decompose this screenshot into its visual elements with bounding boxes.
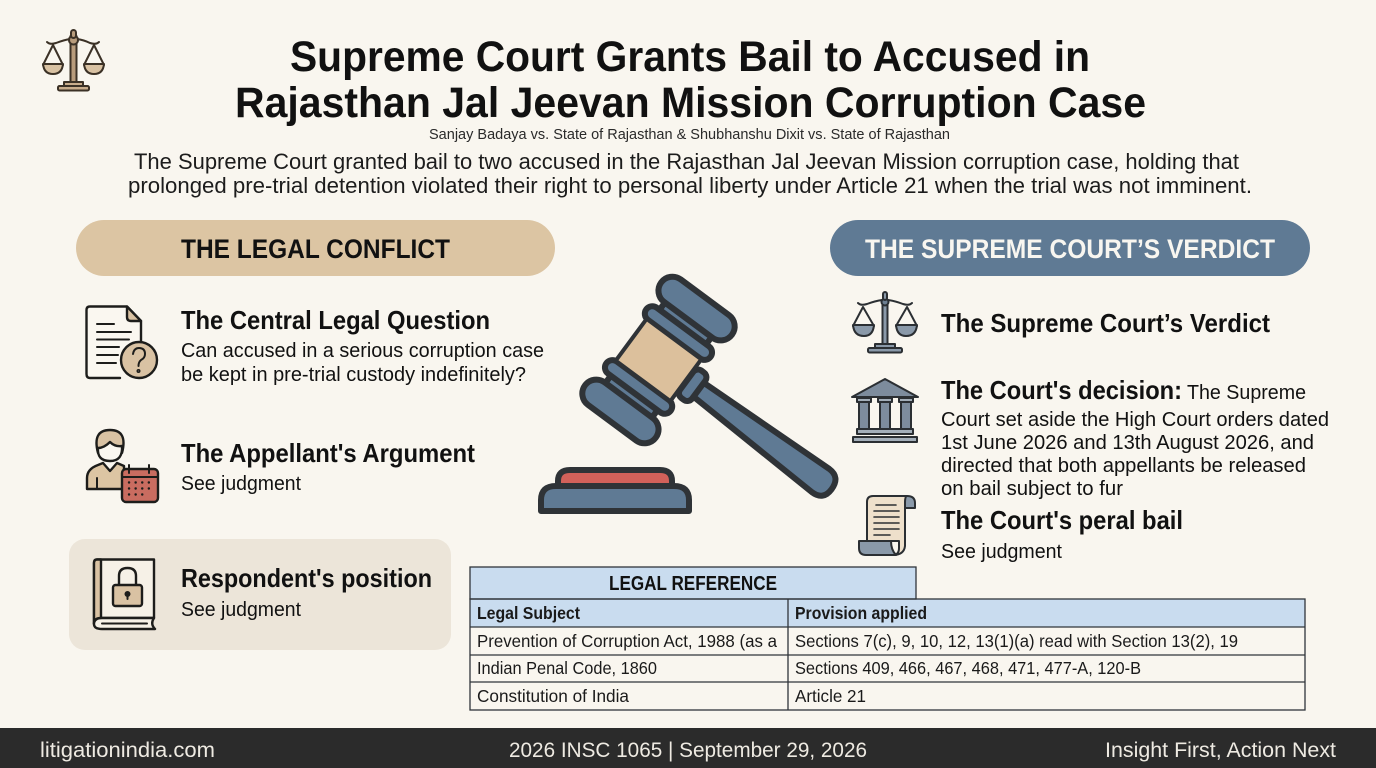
text: the court's decision: The Court's decision: [941, 375, 1182, 405]
text: respondent's position: See judgment [181, 599, 301, 621]
table header row: Legal Subject [477, 603, 580, 623]
icon: book with padlock [94, 560, 155, 629]
panel: respondent's position [69, 539, 451, 650]
table row: constitution of india: Article 21 [795, 686, 866, 706]
icon: scales of justice, verdict [853, 292, 917, 352]
table row: prevention of corruption act: Sections 7(c), 9, 10, 12, 13(1)(a) read with Section 13(2), 19 [795, 631, 1238, 651]
text: the court's decision: 1st June 2026 and 13th August 2026, and [941, 432, 1314, 454]
panel heading: the legal conflict [76, 220, 555, 276]
text: the court's decision: Court set aside the High Court orders dated [941, 409, 1329, 431]
text: the court's peral bail: The Court's peral bail [941, 505, 1183, 535]
table row: indian penal code: Indian Penal Code, 1860 [477, 658, 657, 678]
text: the central legal question: Can accused in a serious corruption case [181, 340, 544, 362]
table title: LEGAL REFERENCE [609, 572, 777, 595]
gavel base [541, 470, 689, 511]
text: the appellant's argument: The Appellant's Argument [181, 438, 475, 468]
text: the supreme court's verdict: The Supreme Court’s Verdict [941, 308, 1270, 338]
subtitle: case names: Sanjay Badaya vs. State of Rajasthan & Shubhanshu Dixit vs. State of Rajasthan [429, 127, 950, 143]
text: respondent's position: Respondent's position [181, 563, 432, 593]
table header row: Provision applied [795, 603, 927, 623]
table row: indian penal code [477, 658, 1141, 678]
table row: indian penal code: Sections 409, 466, 467, 468, 471, 477-A, 120-B [795, 658, 1141, 678]
icon: courthouse [852, 379, 918, 442]
panel heading: the supreme court's verdict: THE SUPREME COURT’S VERDICT [865, 234, 1275, 264]
text: the court's peral bail: See judgment [941, 541, 1062, 563]
table row: constitution of india: Constitution of India [477, 686, 629, 706]
icon: scroll [859, 496, 915, 555]
text: the court's decision: on bail subject to fur [941, 478, 1123, 500]
summary text [128, 149, 1252, 198]
footer bar [0, 728, 1376, 768]
title [235, 33, 1146, 127]
text: the court's peral bail [941, 505, 1183, 563]
icon: scales of justice, header [43, 30, 104, 90]
text: the central legal question: The Central Legal Question [181, 305, 490, 335]
text: the appellant's argument [181, 438, 475, 495]
footer bar: Insight First, Action Next [1105, 739, 1336, 762]
table header row [477, 603, 927, 623]
table row: prevention of corruption act [477, 631, 1238, 651]
text: the appellant's argument: See judgment [181, 473, 301, 495]
gavel hammer [577, 271, 879, 551]
text: the central legal question: be kept in pre-trial custody indefinitely? [181, 364, 526, 386]
illustration: judge's gavel [541, 271, 879, 551]
text: respondent's position [181, 563, 432, 621]
panel heading: the legal conflict: THE LEGAL CONFLICT [181, 234, 450, 264]
footer bar: 2026 INSC 1065 | September 29, 2026 [509, 739, 867, 762]
table row: constitution of india [477, 686, 866, 706]
title: Supreme Court Grants Bail to Accused in [290, 33, 1090, 81]
text: the court's decision [941, 375, 1329, 500]
text: the central legal question [181, 305, 544, 386]
title: Rajasthan Jal Jeevan Mission Corruption Case [235, 79, 1146, 127]
footer bar: litigationindia.com [40, 739, 215, 762]
text: the court's decision: directed that both appellants be released [941, 455, 1306, 477]
icon: document with question mark [86, 306, 157, 378]
text: the court's decision: The Supreme [1187, 382, 1306, 404]
panel heading: the supreme court's verdict [830, 220, 1310, 276]
summary text: prolonged pre-trial detention violated their right to personal liberty under Article 21 when the trial was not imminent. [128, 173, 1252, 198]
table: legal reference [470, 567, 1305, 710]
icon: person with calendar [87, 430, 158, 502]
table row: prevention of corruption act: Prevention of Corruption Act, 1988 (as a [477, 631, 777, 651]
summary text: The Supreme Court granted bail to two accused in the Rajasthan Jal Jeevan Mission corruption case, holding that [134, 149, 1239, 174]
